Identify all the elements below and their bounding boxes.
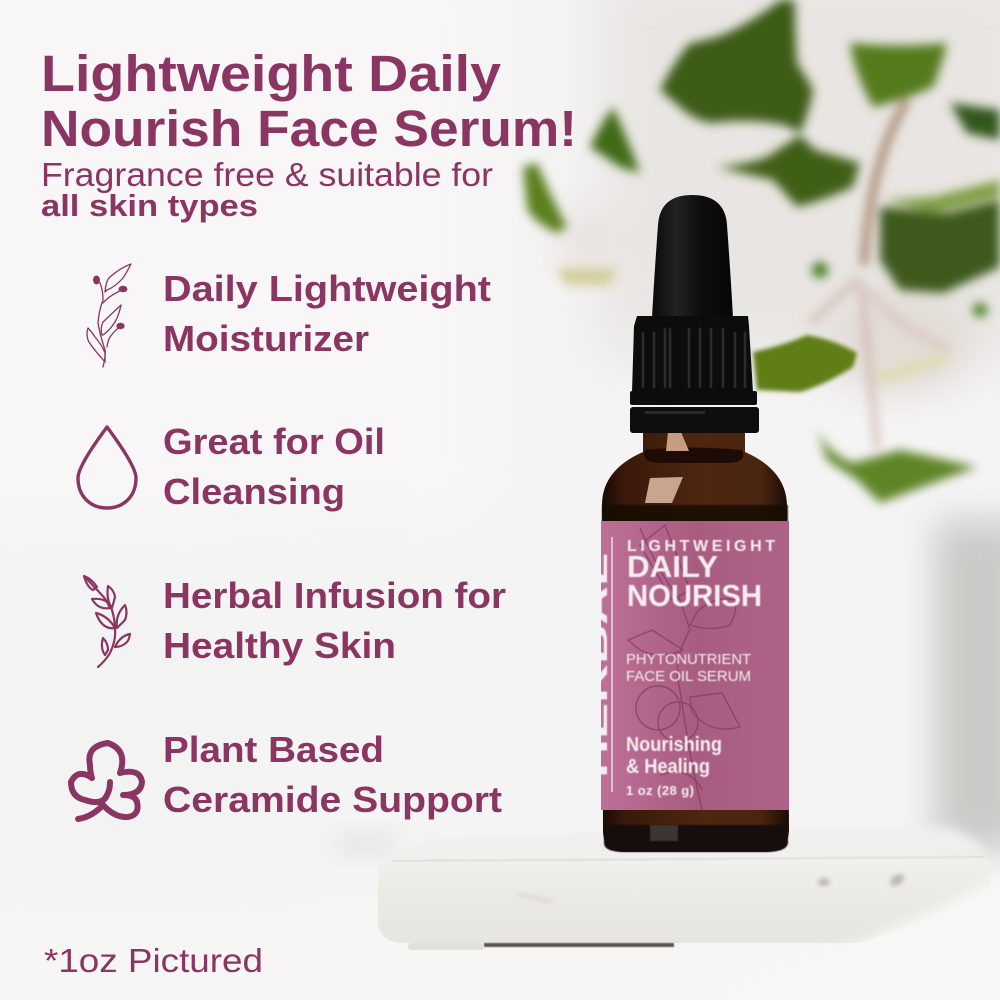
feature: ceramide support: Plant Based: [163, 729, 384, 770]
label text: [626, 538, 775, 798]
label text: FACE OIL SERUM: [626, 668, 751, 685]
feature: herbal infusion: [163, 575, 506, 666]
title: Nourish Face Serum!: [41, 100, 577, 157]
bottom right foreground blur: [700, 870, 1000, 1000]
glass highlights: [666, 432, 689, 451]
feature: oil cleansing: Cleansing: [163, 471, 345, 512]
feature: herbal infusion: Herbal Infusion for: [163, 575, 506, 616]
icon: water drop: [78, 427, 136, 508]
feature: ceramide support: Ceramide Support: [163, 779, 502, 820]
title: Lightweight Daily: [41, 45, 502, 102]
label text: LIGHTWEIGHT: [627, 538, 775, 555]
pink label: [601, 521, 789, 810]
subtitle: all skin types: [41, 188, 258, 223]
label text: DAILY: [627, 549, 718, 584]
feature: oil cleansing: Great for Oil: [163, 421, 385, 462]
rubber dropper bulb: [652, 195, 733, 318]
feature: herbal infusion: Healthy Skin: [163, 625, 396, 666]
title: [41, 45, 577, 157]
glass body: [602, 430, 789, 852]
footnote: *1oz Pictured: [44, 942, 263, 979]
label text: PHYTONUTRIENT: [626, 651, 751, 668]
label text: NOURISH: [627, 578, 762, 613]
label text: Nourishing: [626, 734, 722, 756]
feature: moisturizer: [163, 268, 491, 359]
label botanical line art: [628, 525, 740, 810]
label spine text: HERBAL: [581, 553, 614, 778]
feature: ceramide support: [163, 729, 502, 820]
feature: oil cleansing: [163, 421, 385, 512]
ribbed cap: [632, 316, 753, 392]
label text: 1 oz (28 g): [626, 783, 694, 798]
marble slab: [378, 828, 992, 950]
icon: cotton plant: [71, 743, 142, 819]
product bottle: [581, 195, 789, 852]
subtitle: [41, 156, 493, 223]
icon: leafy sprig with berries: [87, 264, 131, 367]
background foliage: [523, 0, 1000, 503]
icon: herb sprig: [84, 576, 130, 667]
subtitle: Fragrance free & suitable for: [41, 156, 493, 193]
feature: moisturizer: Moisturizer: [163, 318, 369, 359]
feature: moisturizer: Daily Lightweight: [163, 268, 491, 309]
label text: & Healing: [626, 756, 710, 778]
